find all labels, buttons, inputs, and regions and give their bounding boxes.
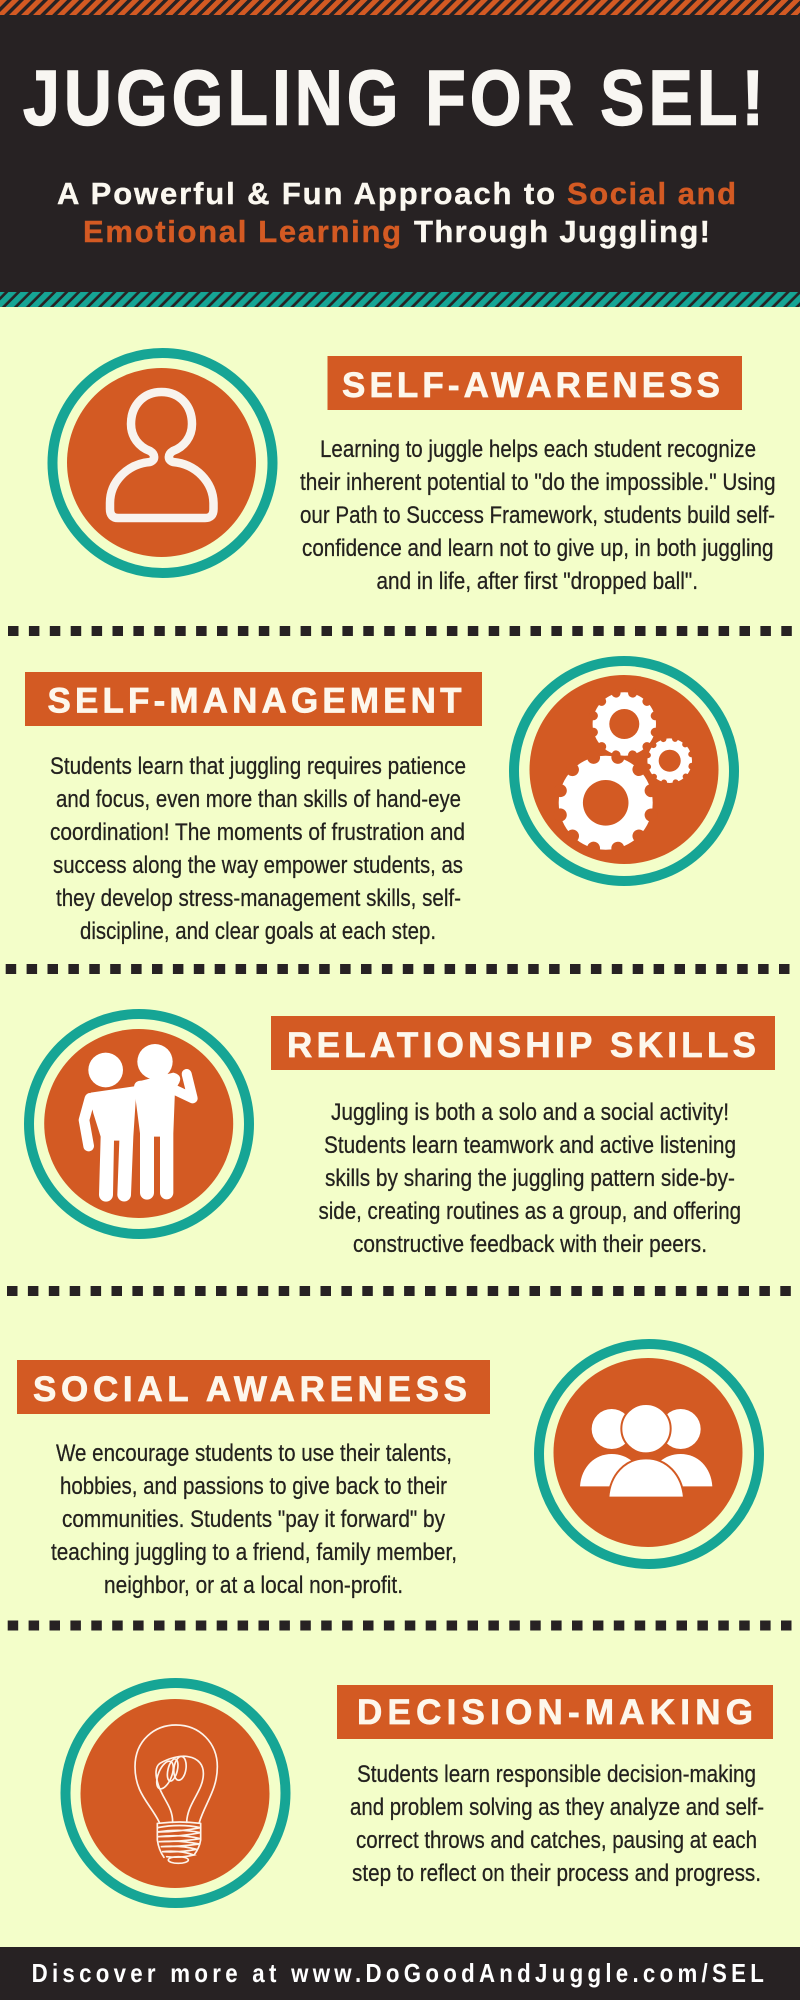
footer bar bbox=[0, 1947, 800, 2000]
text block: social awareness: neighbor, or at a local non-profit. bbox=[104, 1572, 403, 1599]
heading: relationship skills: RELATIONSHIP SKILLS bbox=[287, 1026, 756, 1065]
text block: self-awareness: and in life, after first "dropped ball". bbox=[376, 568, 698, 595]
heading: social awareness: SOCIAL AWARENESS bbox=[33, 1370, 467, 1409]
icon: light bulb bbox=[66, 1683, 286, 1903]
text block: relationship skills: side, creating routines as a group, and offering bbox=[318, 1198, 741, 1225]
heading: social awareness bbox=[17, 1360, 490, 1414]
panel: decision-making bbox=[66, 1683, 773, 1903]
icon: two friends bbox=[29, 1014, 249, 1234]
text block: self-management: success along the way empower students, as bbox=[53, 852, 463, 879]
heading: self-management bbox=[25, 672, 482, 726]
panel: self-management bbox=[25, 661, 734, 945]
text block: self-management: discipline, and clear goals at each step. bbox=[80, 918, 436, 945]
text block: relationship skills: Students learn teamwork and active listening bbox=[324, 1132, 736, 1159]
panel: self-awareness bbox=[52, 353, 776, 595]
subtitle: Emotional Learning bbox=[83, 214, 401, 249]
text block: social awareness: We encourage students to use their talents, bbox=[56, 1440, 452, 1467]
text block: self-management: Students learn that juggling requires patience bbox=[50, 753, 466, 780]
text block: social awareness: hobbies, and passions to give back to their bbox=[60, 1473, 447, 1500]
text block: self-management bbox=[50, 753, 466, 945]
heading: decision-making bbox=[337, 1685, 773, 1739]
header panel bbox=[0, 0, 800, 307]
panel: relationship skills bbox=[29, 1014, 775, 1258]
heading: self-awareness: SELF-AWARENESS bbox=[342, 366, 720, 405]
text block: self-management: and focus, even more than skills of hand-eye bbox=[56, 786, 461, 813]
text block: self-management: coordination! The moments of frustration and bbox=[50, 819, 465, 846]
icon: group of people bbox=[539, 1344, 759, 1564]
text block: relationship skills: skills by sharing the juggling pattern side-by- bbox=[325, 1165, 735, 1192]
text block: social awareness: teaching juggling to a friend, family member, bbox=[51, 1539, 457, 1566]
heading: relationship skills bbox=[271, 1016, 775, 1070]
text block: decision-making bbox=[350, 1761, 764, 1887]
subtitle: Through Juggling! bbox=[414, 214, 710, 249]
subtitle: A Powerful & Fun Approach to bbox=[57, 176, 555, 211]
heading: self-management: SELF-MANAGEMENT bbox=[48, 682, 462, 721]
text block: relationship skills: constructive feedback with their peers. bbox=[353, 1231, 707, 1258]
text block: relationship skills: Juggling is both a solo and a social activity! bbox=[331, 1099, 729, 1126]
text block: social awareness: communities. Students "pay it forward" by bbox=[62, 1506, 445, 1533]
text block: self-awareness bbox=[300, 436, 776, 595]
icon: gears bbox=[514, 661, 734, 881]
heading: self-awareness bbox=[328, 356, 742, 410]
text block: social awareness bbox=[51, 1440, 457, 1599]
heading: decision-making: DECISION-MAKING bbox=[357, 1693, 753, 1732]
subtitle: Social and bbox=[567, 176, 736, 211]
icon: person outline bbox=[52, 353, 272, 573]
panel: social awareness bbox=[17, 1344, 759, 1599]
text block: relationship skills bbox=[318, 1099, 741, 1258]
subtitle bbox=[57, 176, 736, 249]
text block: self-management: they develop stress-management skills, self- bbox=[56, 885, 461, 912]
